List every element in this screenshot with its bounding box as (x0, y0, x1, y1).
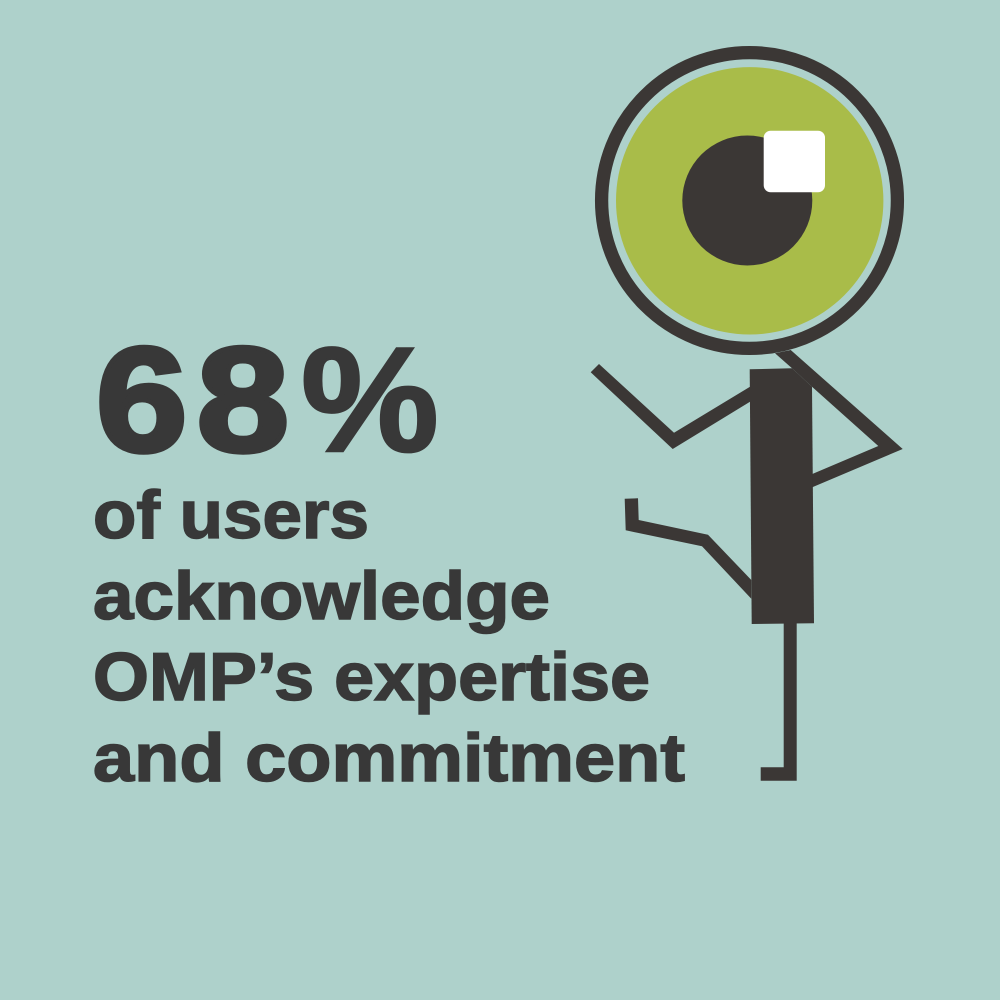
big number: 68%: 8 (196, 316, 289, 483)
eye head (602, 53, 897, 348)
big number: 68%: 6 (96, 318, 188, 483)
big number: 68%: % (301, 317, 439, 483)
description text: acknowledge (93, 558, 550, 634)
left arm (591, 364, 750, 449)
raised leg (625, 498, 751, 599)
description text: OMP’s expertise (93, 639, 650, 715)
body (750, 368, 814, 624)
description text (93, 477, 685, 796)
right arm (775, 350, 903, 487)
icon: eye character (591, 53, 903, 781)
description text: of users (93, 477, 369, 553)
standing leg (761, 622, 797, 781)
description text: and commitment (93, 720, 685, 796)
text block: statistic (93, 316, 685, 796)
big number: 68% (96, 316, 439, 483)
